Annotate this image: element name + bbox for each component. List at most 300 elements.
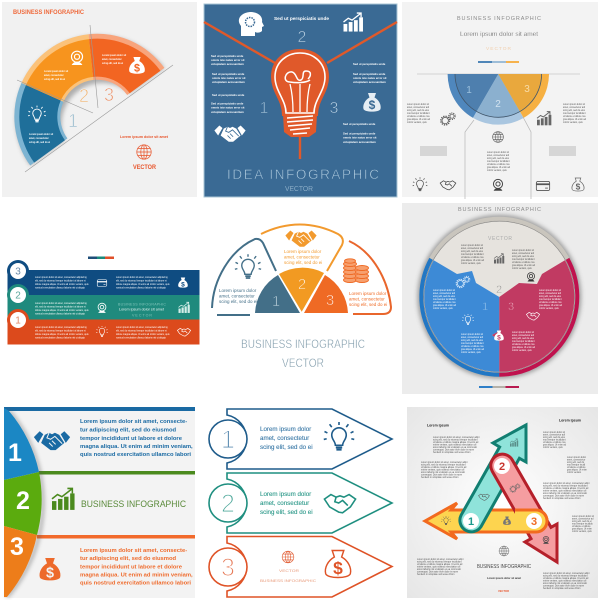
text block: blue: amet, consectetur [29,137,49,140]
text block g: scing elit, sed do eiusmod tempor incididunt [417,560,462,564]
text block a: henderit in voluptate velit esse cillum [433,451,470,454]
red text lower: amet, consectetur adi [512,334,534,337]
gray text right: scing elit, sed do eius [512,255,535,258]
arrow 2: Lorem ipsum dolor [260,491,311,498]
orange arrow [425,503,547,539]
number 1: 1 [466,85,472,96]
blue text lower: scing elit, sed do eius [461,339,484,342]
icon: money bag [129,57,145,75]
arc shadow [7,411,43,597]
label right: Lorem ipsum [559,418,581,422]
grey text block right [549,146,576,156]
icon: chart [537,112,551,125]
blue text lower: amet, consectetur adi [461,336,483,339]
text block: orange: scing elit, sed do ei [44,78,66,81]
teal arrow [460,425,526,532]
icon: handshake [440,181,456,190]
text block g: ut labore et dolore magna aliqua. Ut enim ad [417,563,463,566]
icon: handshake [177,328,191,336]
orange rule [37,535,195,538]
number 1: 1 [8,439,22,467]
text block f: gna aliqua. Ut enim [572,528,592,530]
number 1: 1 [272,293,280,310]
title: IDEA INFOGRAPHIC [227,167,379,182]
icon: chart [510,439,518,447]
vector label: VECTOR [133,165,157,171]
number 2: 2 [16,487,30,515]
left text block: omnis iste natus error sit [211,106,244,110]
left text block: Lorem ipsum dolor sit [407,103,429,106]
icon: money bag [178,278,188,288]
centre text block: minim veniam, quis [487,170,508,172]
text block f: mod tempor incididu [572,522,593,526]
teal bar centre heading: Lorem ipsum dolor sit amet [119,308,165,312]
segment 3: red-orange [89,34,164,95]
right text block: voluptatem accusantium [353,80,386,84]
centre text block: Lorem ipsum dolor sit [487,151,509,154]
icon: webcam [543,536,549,543]
text block e: Lorem ipsum dolor sit amet, consectetur adipi [543,482,590,485]
text block a: minim veniam, quis nostrud exercitation ull [433,444,477,446]
text block: red: scing elit, sed do ei [102,62,124,65]
vector label: VECTOR [488,236,512,242]
blue text: tempor incididunt ut labore et dolore [80,436,183,442]
right text block: scing elit, sed do eius [563,109,586,112]
icon: bulb [413,177,427,191]
red bar text: dolore magna aliqua. Ut enim ad minim veniam, quis [35,333,89,336]
red text upper: mod tempor incididunt [539,298,562,301]
icon: bulb [96,326,108,336]
text block d: Lorem ipsum dolor [567,456,586,459]
ring: gray [431,219,568,259]
centre text block: gna aliqua. Ut enim ad [487,166,511,169]
number 1: 1 [68,111,78,131]
left text block: Sed ut perspiciatis unde [212,93,245,97]
text block d: minim veniam [567,472,581,474]
gray text left: Lorem ipsum dolor sit [461,244,483,247]
left text block: Sed ut perspiciatis unde [211,102,244,106]
blue bar text: Lorem ipsum dolor sit amet, consectetur adipiscing [35,276,87,279]
gray disc [423,221,575,373]
text block: red: amet, consectetur [102,58,122,61]
right text block: amet, consectetur adi [563,106,585,109]
gray text left: mod tempor incididunt [461,253,484,256]
icon: money bag [363,93,381,112]
blue bar text: elit, sed do eiusmod tempor incididunt ut labore et [35,280,86,282]
top caption: Sed ut perspiciatis unde [274,16,330,21]
arrow 1 [209,409,392,469]
badge 1: 1 [468,516,474,528]
gray text right: mod tempor incididunt [512,258,535,261]
gray text right: ut labore et dolore ma [512,261,535,264]
arrow 1: scing elit, sed do ei [260,444,313,451]
text block c: amet, consectetur adi [543,434,565,436]
ring: red [499,259,577,375]
red text lower: gna aliqua. Ut enim ad [512,346,536,349]
red text lower: Lorem ipsum dolor sit [512,331,534,334]
green rule [39,471,195,474]
teal bar text: dolore magna aliqua. Ut enim ad minim veniam, quis [35,309,89,312]
right text: amet, consectetur [349,296,385,302]
blue text: quis nostrud exercitation ullamco labori [80,452,191,458]
icon: card [536,181,550,191]
vector label: VECTOR [486,46,512,52]
blue text lower: minim veniam, quis [461,352,482,354]
sector 1 [4,408,39,480]
icon: gears [441,113,455,125]
blue bar text: nostrud exercitation ullamco laboris nisi ut aliquip [35,286,86,290]
icon: handshake [34,431,70,450]
panel: semicircle business infographic [2,2,197,197]
number 2: 2 [496,284,502,296]
red bar text: nostrud exercitation ullamco laboris nisi ut aliquip [35,336,86,340]
segment 2: orange [22,34,93,102]
centre text: Lorem ipsum dolor [284,249,322,254]
arrow 3: 3 [221,554,235,582]
number 1: 1 [482,301,488,313]
right text: scing elit, sed do ei [349,302,387,307]
orange text: tempor incididunt ut labore et dolore [80,564,183,570]
text block g: amco laboris nisi ut aliquip ex ea commodo [417,568,462,571]
panel: numbered list with arc [4,407,195,598]
icon: handshake [479,494,489,500]
colour key [479,386,519,388]
left text block: Sed ut perspiciatis unde [211,54,244,58]
text block b: scing elit, sed do eiusmod tempor incididunt [421,464,466,466]
left text: amet, consectetur [219,294,255,298]
right text block: gna aliqua. Ut enim ad [563,118,587,121]
teal bar text: elit, sed do eiusmod tempor incididunt ut labore et [35,306,86,308]
number 3: 3 [104,85,114,105]
bar 2: teal [7,284,200,320]
text block e: minim veniam, quis nostrud exercitation ull [543,490,587,492]
icon: chart [178,302,190,313]
text block e: scing elit, sed do eiusmod tempor incididunt [543,484,588,488]
text block h: consequat. Duis aute irure dolor in repre [543,584,585,588]
icon: handshake [285,230,317,247]
left text block: amet, consectetur adi [407,106,429,109]
text block a: amco laboris nisi ut aliquip ex ea commodo [433,446,478,449]
icon: coins [344,259,368,282]
arrow 2: scing elit, sed do ei [260,509,313,516]
badge 2 [10,287,26,303]
blue bar text: dolore magna aliqua. Ut enim ad minim veniam, quis [116,283,170,286]
red text upper: scing elit, sed do eius [539,295,562,298]
text block h: henderit in voluptate velit esse cillum [543,587,580,590]
red text upper: minim veniam, quis [539,308,560,310]
grey text block left [420,146,447,156]
title: BUSINESS INFOGRAPHIC [241,339,365,351]
text block e: henderit in voluptate velit esse cillum [543,497,580,500]
text block g: Lorem ipsum dolor sit amet, consectetur adipi [417,558,464,561]
blue text upper: Lorem ipsum dolor sit [433,289,455,292]
number 3: 3 [508,301,514,313]
blue text lower: gna aliqua. Ut enim ad [461,348,485,351]
blue text upper: mod tempor incididunt [433,298,456,301]
arrow 2 [209,473,392,533]
red bar text: dolore magna aliqua. Ut enim ad minim veniam, quis [116,333,170,336]
number 3: 3 [326,292,334,309]
blue text upper: scing elit, sed do eius [433,295,456,298]
blue text upper: gna aliqua. Ut enim ad [433,304,457,307]
icon: webcam [71,51,83,64]
text block: orange: amet, consectetur [44,74,64,77]
heading: BUSINESS INFOGRAPHIC [13,9,84,16]
centre text block: scing elit, sed do eius [487,157,510,160]
text block a: consequat. Duis aute irure dolor in repre [433,448,475,452]
number 1: 1 [260,100,269,117]
number 3: 3 [10,533,24,561]
text block b: henderit in voluptate velit esse cillum [421,476,458,479]
colour key [478,61,519,63]
sector 2 [279,268,324,312]
number 3: 3 [524,84,530,95]
colour key [88,256,114,259]
text block h: scing elit, sed do eiusmod tempor incididunt [543,574,588,578]
text block c: ut labore et dolore ma [543,441,566,444]
gray text right: minim veniam, quis [512,268,533,270]
outline 3 [349,241,391,314]
blue text: tur adipiscing elit, sed do eiusmod [80,428,177,434]
text block: orange: Lorem ipsum dolor sit [44,70,68,73]
number 2: 2 [298,276,306,293]
right text block: voluptatem accusantium [343,140,376,144]
red text upper: gna aliqua. Ut enim ad [539,304,563,307]
bar 1: red [7,309,200,344]
gray text left: amet, consectetur adi [461,247,483,250]
icon: webcam [527,273,535,281]
heading: BUSINESS INFOGRAPHIC [458,207,541,213]
left text block: minim veniam, quis [407,122,428,124]
centre text: amet, consectetur [284,254,320,260]
sector 3 [4,526,37,597]
blue text upper: ut labore et dolore ma [433,301,456,304]
blue text: Lorem ipsum dolor sit amet, consecte- [80,419,187,425]
top edge [417,73,580,75]
left text block: voluptatem accusantium [212,80,245,84]
outline 2 [261,224,343,271]
text block d: scing elit, sed do [567,461,585,464]
red text lower: scing elit, sed do eius [512,337,535,340]
text block h: Lorem ipsum dolor sit amet, consectetur adipi [543,572,590,575]
right text block: mod tempor incididunt [563,112,586,115]
sector 2 [4,472,42,535]
text block: blue: Lorem ipsum dolor sit [29,133,53,136]
gray text left: gna aliqua. Ut enim ad [461,259,485,262]
title: BUSINESS INFOGRAPHIC [477,564,531,570]
gray text right: amet, consectetur adi [512,252,534,255]
blue text lower: mod tempor incididunt [461,342,484,345]
arrow 1: amet, consectetur [260,435,309,442]
text block a: ut labore et dolore magna aliqua. Ut enim ad [433,441,479,444]
left text block: omnis iste natus error sit [212,76,245,80]
text block e: consequat. Duis aute irure dolor in repre [543,494,585,498]
icon: chart [494,254,504,264]
text block f: ut labore et dolore [572,525,591,528]
icon: bulb [441,516,451,525]
red text lower: ut labore et dolore ma [512,343,535,346]
text block h: ut labore et dolore magna aliqua. Ut enim ad [543,577,589,580]
circle shadow [417,215,581,379]
gray text left: ut labore et dolore ma [461,256,484,259]
gray text right: Lorem ipsum dolor sit [512,249,534,252]
text block d: amet, consectetur [567,458,585,462]
blue rule [4,407,195,411]
left text block: gna aliqua. Ut enim ad [407,118,431,121]
red text lower: minim veniam, quis [512,350,533,352]
text block f: amet, consectetur ad [572,518,594,520]
connector lines [204,22,397,159]
text block c: gna aliqua. Ut enim ad [543,444,567,446]
badge 1: 1 [15,316,21,326]
text block e: amco laboris nisi ut aliquip ex ea commodo [543,492,588,495]
icon: money bag [40,558,60,581]
left text block: voluptatem accusantium [211,110,244,114]
left text block: scing elit, sed do eius [407,109,430,112]
subheading: Lorem ipsum dolor sit amet [460,31,538,38]
label left: Lorem ipsum [427,424,449,428]
badge 2 [494,458,510,474]
heading: BUSINESS INFOGRAPHIC [81,499,186,509]
text block d: ut labore et dolore [567,466,586,469]
panel: triangular arrows [407,407,598,598]
badge 1 [463,513,479,529]
sector 3 [304,275,348,313]
left text: Lorem ipsum dolor [219,288,257,293]
right text block: Sed ut perspiciatis unde [343,122,376,126]
icon: money bag [572,178,584,191]
text block a: scing elit, sed do eiusmod tempor incididunt [433,438,478,442]
blue bar text: nostrud exercitation ullamco laboris nisi ut aliquip [116,286,167,290]
blue bar text: elit, sed do eiusmod tempor incididunt ut labore et [116,280,167,282]
arrow 3: VECTOR [279,568,299,573]
segment 1: blue [14,83,67,166]
red text upper: amet, consectetur adi [539,292,561,295]
vector label: VECTOR [282,358,324,370]
text block: red: Lorem ipsum dolor sit [102,54,126,57]
teal bar centre heading: VECTOR [132,314,152,318]
centre text block: ut labore et dolore ma [487,163,510,166]
panel: half circle outline [212,224,391,370]
ring: blue [421,259,499,375]
right text block: Sed ut perspiciatis unde [343,132,376,136]
blue text: magna aliqua. Ut enim ad minim veniam, [80,444,193,450]
blue text upper: amet, consectetur adi [433,292,455,295]
half disc chart [448,74,549,125]
panel: half-disc line icons [402,2,598,199]
icon: globe [499,546,509,556]
gray text right: gna aliqua. Ut enim ad [512,264,536,267]
text block g: henderit in voluptate velit esse cillum [417,573,454,576]
text block f: scing elit, sed do ei [572,520,592,523]
gray text left: scing elit, sed do eius [461,250,484,253]
badge 2: 2 [15,290,21,302]
left text block: mod tempor incididunt [407,112,430,115]
red bar text: Lorem ipsum dolor sit amet, consectetur adipiscing [35,326,87,329]
orange text: quis nostrud exercitation ullamco labori [80,580,191,586]
text block a: Lorem ipsum dolor sit amet, consectetur adipi [433,436,480,439]
number 3: 3 [330,100,339,117]
arrow 2: amet, consectetur [260,500,309,507]
icon: head with gears [239,12,264,36]
icon: card [97,280,107,286]
panel: outlined arrows [209,409,392,597]
badge 1 [10,312,26,328]
badge 2: 2 [499,461,505,473]
badge 3: 3 [15,266,21,278]
subtitle: Lorem ipsum dolor sit amet [487,576,521,580]
icon: bulb [235,254,261,278]
yellow end over red [515,510,547,532]
cut lines [17,25,173,172]
icon: globe [493,132,503,142]
icon: webcam [98,303,106,312]
vector label: VECTOR [498,589,509,593]
orange text: magna aliqua. Ut enim ad minim veniam, [80,572,193,578]
text block b: minim veniam, quis nostrud exercitation ull [421,468,465,472]
teal bar text: nostrud exercitation ullamco laboris nisi ut aliquip [35,312,86,316]
red text upper: Lorem ipsum dolor sit [539,289,561,292]
text block h: amco laboris nisi ut aliquip ex ea commodo [543,582,588,585]
arrow 3 [209,536,392,597]
icon: money bag [494,330,504,341]
badge 3: 3 [531,516,537,528]
blue text upper: minim veniam, quis [433,308,454,310]
text block c: mod tempor incididunt [543,438,566,442]
text block b: ut labore et dolore magna aliqua. Ut enim ad [421,466,467,469]
text block g: consequat. Duis aute irure dolor in repre [417,570,459,574]
text block c: minim veniam, quis [543,447,564,449]
centre text block: mod tempor incididunt [487,160,510,163]
right text block: Sed ut perspiciatis unde [353,72,386,76]
number 2: 2 [79,86,89,106]
arrow 1: Lorem ipsum dolor [260,426,311,433]
connector lines [465,117,531,199]
left text block: Sed ut perspiciatis unde [212,72,245,76]
icon: webcam [493,179,503,190]
icon: money bag [503,516,511,526]
right text block: omnis iste natus error sit [353,76,386,80]
red text lower: mod tempor incididunt [512,340,535,343]
blue text lower: Lorem ipsum dolor sit [461,333,483,336]
red text upper: ut labore et dolore ma [539,301,562,304]
red bar text: elit, sed do eiusmod tempor incididunt ut labore et [116,330,167,332]
text block b: amco laboris nisi ut aliquip ex ea commodo [421,471,466,474]
red bar text: nostrud exercitation ullamco laboris nisi ut aliquip [116,336,167,340]
centre text block: amet, consectetur adi [487,154,509,157]
vector label: VECTOR [285,186,313,193]
right text block: Sed ut perspiciatis unde [353,62,386,66]
right text block: minim veniam, quis [563,122,584,124]
icon: globe [137,145,151,159]
blue text lower: ut labore et dolore ma [461,345,484,348]
right text block: omnis iste natus error sit [343,136,376,140]
outline 1 [212,239,276,315]
left text block: omnis iste natus error sit [211,58,244,62]
blue bar text: dolore magna aliqua. Ut enim ad minim veniam, quis [35,283,89,286]
panel: idea infographic [204,4,397,197]
left text block: voluptatem accusantium [211,62,244,66]
left text: scing elit, sed do ei [219,299,257,304]
badge 3 [10,263,26,279]
icon: gears [510,484,520,492]
arrow 2: 2 [221,490,235,518]
heading: BUSINESS INFOGRAPHIC [457,16,541,22]
sector: blue [424,260,499,372]
right text block: Lorem ipsum dolor sit [563,103,585,106]
number 2: 2 [298,29,307,46]
text block d: gna aliqua. Ut enim [567,468,587,472]
